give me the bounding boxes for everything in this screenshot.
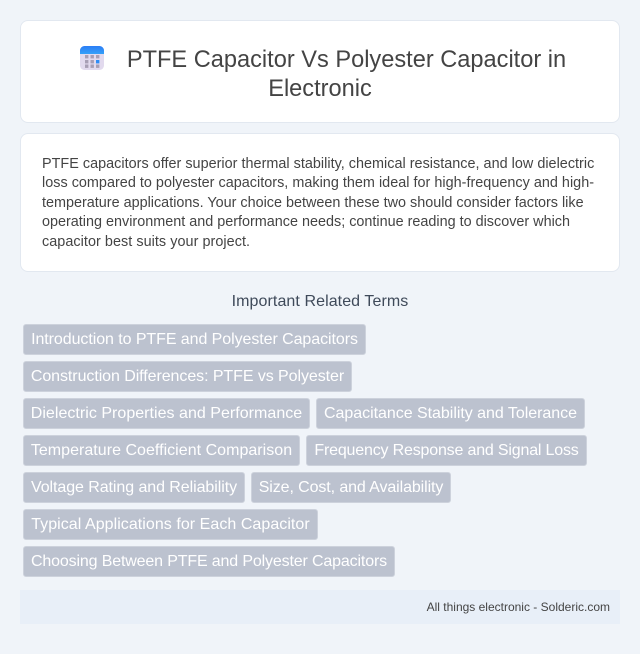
related terms chips bbox=[23, 324, 587, 577]
chip: Voltage Rating and Reliability bbox=[31, 479, 237, 496]
title: Electronic bbox=[268, 76, 372, 102]
chip: Capacitance Stability and Tolerance bbox=[324, 405, 577, 422]
chip: Introduction to PTFE and Polyester Capacitors bbox=[31, 331, 358, 348]
chip bbox=[23, 398, 310, 429]
chip: Frequency Response and Signal Loss bbox=[314, 442, 579, 459]
chip: Choosing Between PTFE and Polyester Capacitors bbox=[31, 553, 387, 570]
related terms heading: Important Related Terms bbox=[232, 293, 408, 310]
summary text: operating environment and performance needs; continue reading to discover which bbox=[42, 214, 570, 230]
chip: Dielectric Properties and Performance bbox=[31, 405, 302, 422]
chip bbox=[23, 472, 245, 503]
summary text: capacitor best suits your project. bbox=[42, 234, 250, 250]
summary card bbox=[20, 133, 620, 272]
chip bbox=[251, 472, 451, 503]
chip: Typical Applications for Each Capacitor bbox=[31, 516, 310, 533]
chip bbox=[23, 546, 395, 577]
chip bbox=[306, 435, 587, 466]
chip bbox=[316, 398, 585, 429]
chip bbox=[23, 324, 366, 355]
summary text: temperature applications. Your choice between these two should consider factors like bbox=[42, 194, 584, 210]
chip bbox=[23, 509, 318, 540]
title bbox=[127, 47, 566, 102]
chip bbox=[23, 435, 300, 466]
title: PTFE Capacitor Vs Polyester Capacitor in bbox=[127, 47, 566, 73]
summary text bbox=[42, 156, 594, 250]
icon: calendar grid bbox=[80, 46, 104, 70]
summary text: loss compared to polyester capacitors, making them ideal for high-frequency and high- bbox=[42, 175, 594, 191]
chip bbox=[23, 361, 352, 392]
chip: Size, Cost, and Availability bbox=[259, 479, 443, 496]
footer bbox=[20, 590, 620, 624]
header card bbox=[20, 20, 620, 123]
chip: Temperature Coefficient Comparison bbox=[31, 442, 292, 459]
summary text: PTFE capacitors offer superior thermal stability, chemical resistance, and low dielectric bbox=[42, 156, 594, 172]
chip: Construction Differences: PTFE vs Polyester bbox=[31, 368, 344, 385]
footer text: All things electronic - Solderic.com bbox=[427, 600, 610, 614]
